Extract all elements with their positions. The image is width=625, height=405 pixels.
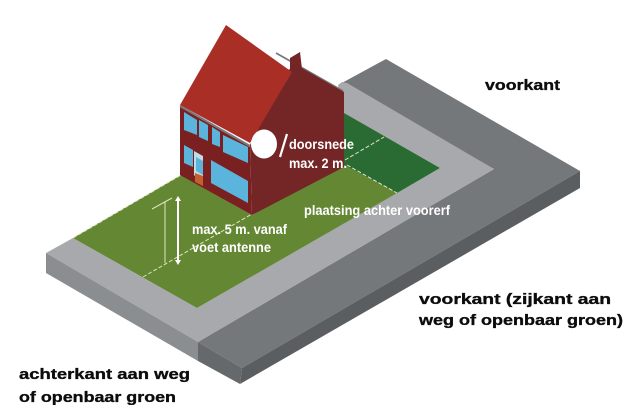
- roof: [180, 25, 292, 143]
- label: antenna height: max. 5 m. vanaf: [192, 221, 287, 237]
- house: [180, 25, 344, 215]
- front wall: [180, 107, 252, 215]
- label: voorkant zijkant: voorkant (zijkant aan: [419, 291, 611, 308]
- garden: front yard: [344, 113, 440, 193]
- door: [194, 151, 203, 186]
- label: antenna height: [192, 221, 287, 255]
- label: plaatsing: plaatsing achter voorerf: [304, 202, 450, 218]
- garden: rear lawn: [73, 165, 397, 308]
- label: doorsnede: [289, 136, 354, 171]
- placement boundary dashed lines: [73, 137, 397, 277]
- label: voorkant zijkant: weg of openbaar groen): [418, 312, 623, 329]
- antenna outline: [152, 198, 172, 263]
- diameter mark: [280, 134, 287, 157]
- satellite dish: [251, 130, 277, 158]
- label: doorsnede: doorsnede: [289, 136, 354, 152]
- gutter: [276, 53, 343, 91]
- windows: [184, 112, 248, 203]
- label: voorkant zijkant: [418, 291, 623, 329]
- label: doorsnede: max. 2 m.: [289, 155, 347, 171]
- front gutter: [180, 106, 250, 146]
- label: voorkant: voorkant: [485, 77, 560, 94]
- plot base: road and pavement: [46, 59, 580, 384]
- chimney: [290, 52, 302, 72]
- height arrow: [175, 196, 181, 265]
- label: antenna height: voet antenne: [192, 239, 271, 255]
- label: achterkant: [19, 366, 190, 405]
- label: achterkant: achterkant aan weg: [19, 366, 190, 383]
- side wall: [250, 66, 344, 215]
